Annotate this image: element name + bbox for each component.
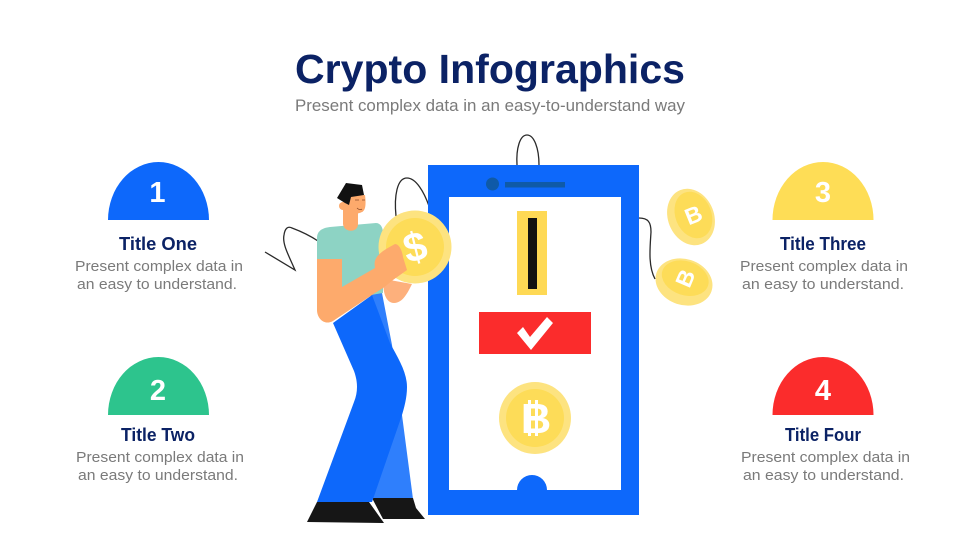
floating coin bottom — [649, 251, 719, 313]
phone body — [428, 165, 639, 515]
back hand — [383, 279, 412, 303]
back leg — [370, 293, 413, 499]
neck — [343, 206, 358, 231]
text: description three — [740, 258, 908, 293]
floating coin bottom: B — [670, 265, 700, 291]
badge: number 4 — [772, 357, 874, 415]
front shoe — [307, 502, 384, 523]
confirmation check — [479, 312, 591, 354]
heading: title two: Title Two — [121, 425, 195, 445]
curved lines — [265, 135, 655, 279]
coin slot — [517, 211, 547, 295]
text: description one: an easy to understand. — [77, 276, 237, 293]
front leg — [317, 295, 407, 502]
panel: item two — [76, 357, 244, 484]
shirt — [317, 223, 383, 300]
text: description two: Present complex data in — [76, 449, 244, 466]
panel: item four — [741, 357, 910, 484]
badge: number 3 — [772, 162, 874, 220]
home button — [517, 475, 547, 490]
character — [307, 183, 452, 523]
bitcoin coin: B — [521, 395, 551, 442]
text: description one: Present complex data in — [75, 258, 243, 275]
badge: number 2: 2 — [150, 375, 166, 407]
badge: number 1: 1 — [149, 177, 166, 209]
text: description four — [741, 449, 910, 484]
subtitle: Present complex data in an easy-to-understand way — [295, 96, 685, 115]
badge: number 2 — [108, 357, 209, 415]
phone — [428, 165, 639, 515]
badge: number 1 — [108, 162, 209, 220]
text: description two — [76, 449, 244, 484]
text: description one — [75, 258, 243, 293]
floating coin top — [659, 181, 723, 253]
text: description three: an easy to understand. — [742, 276, 904, 293]
title: Crypto Infographics — [295, 46, 685, 92]
heading: title four: Title Four — [785, 425, 861, 445]
phone screen — [449, 197, 621, 490]
badge: number 4: 4 — [815, 375, 831, 407]
coin with dollar sign — [378, 210, 452, 284]
text: description two: an easy to understand. — [78, 467, 238, 484]
heading: title three: Title Three — [780, 234, 866, 254]
hair — [337, 183, 364, 205]
text: description four: an easy to understand. — [743, 467, 904, 484]
heading: title one: Title One — [119, 234, 197, 254]
back shoe — [372, 498, 425, 519]
coin with dollar sign: $ — [398, 222, 432, 272]
text: description four: Present complex data in — [741, 449, 910, 466]
floating coin top: B — [681, 200, 706, 230]
panel: item three — [740, 162, 908, 293]
badge: number 3: 3 — [815, 177, 831, 209]
text: description three: Present complex data in — [740, 258, 908, 275]
front arm and hand — [317, 244, 407, 323]
camera and speaker — [486, 178, 565, 190]
face — [339, 195, 366, 214]
panel: item one — [75, 162, 243, 293]
bitcoin coin — [499, 382, 571, 454]
